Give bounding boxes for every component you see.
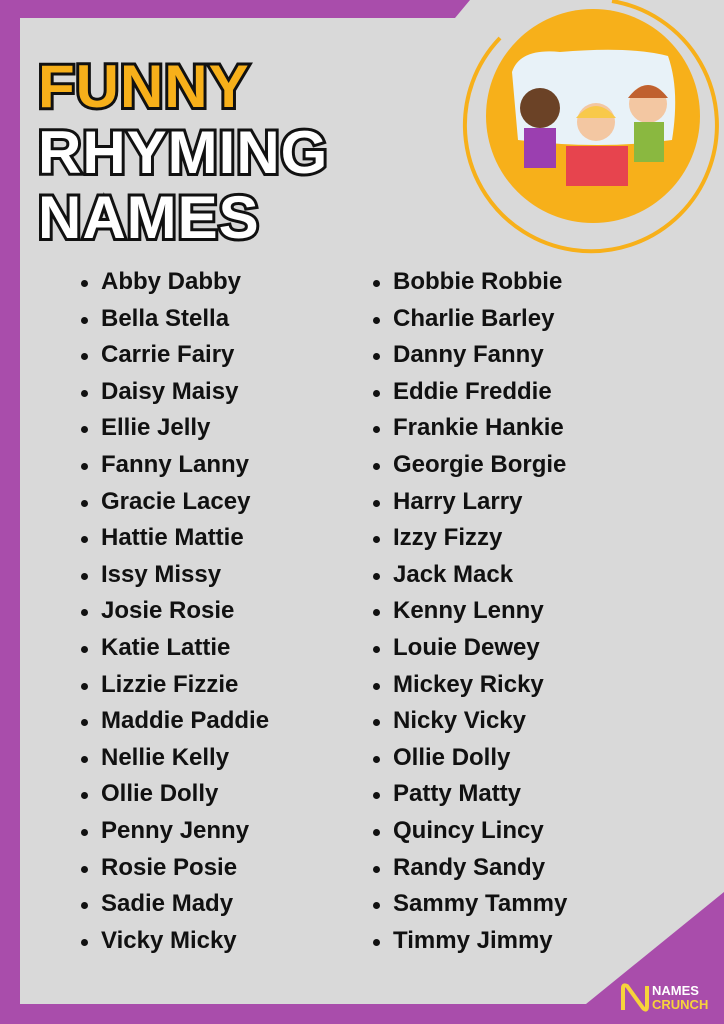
names list: right column: Harry Larry (393, 488, 522, 515)
names list: right column: Georgie Borgie (393, 451, 566, 478)
names list: left column: Carrie Fairy (101, 341, 234, 368)
names list: right column: Izzy Fizzy (393, 524, 502, 551)
text: NAMES (38, 184, 260, 251)
names list: left column: Rosie Posie (101, 854, 237, 880)
names list: left column: Bella Stella (101, 305, 229, 332)
names list: right column: Charlie Barley (393, 305, 554, 332)
names list: left column: Ollie Dolly (101, 780, 218, 807)
text: FUNNY (38, 53, 250, 120)
names list: right column: Ollie Dolly (393, 744, 510, 771)
names list: left column: Hattie Mattie (101, 524, 244, 551)
names list: left column: Ellie Jelly (101, 414, 210, 441)
names list: left column: Lizzie Fizzie (101, 671, 238, 698)
names list: right column: Timmy Jimmy (393, 927, 553, 954)
names list: left column: Vicky Micky (101, 927, 237, 954)
names list: right column (373, 268, 568, 954)
text: RHYMING (38, 119, 328, 186)
names list: right column: Jack Mack (393, 561, 513, 588)
names list: left column: Daisy Maisy (101, 378, 238, 405)
names list: right column: Louie Dewey (393, 634, 540, 661)
names list: left column: Sadie Mady (101, 890, 233, 917)
names list: left column: Katie Lattie (101, 634, 230, 661)
names list: right column: Quincy Lincy (393, 817, 544, 844)
logo: NAMES (652, 983, 699, 998)
names list: right column: Bobbie Robbie (393, 268, 562, 295)
names list: left column: Josie Rosie (101, 597, 234, 624)
names list: left column: Maddie Paddie (101, 707, 269, 734)
names list: left column: Penny Jenny (101, 817, 249, 844)
orange circle icon (486, 9, 700, 223)
names list: left column: Fanny Lanny (101, 451, 249, 478)
names list: right column: Frankie Hankie (393, 414, 564, 441)
names list: right column: Nicky Vicky (393, 707, 526, 734)
names list: right column: Danny Fanny (393, 341, 544, 368)
names list: right column: Sammy Tammy (393, 890, 567, 917)
names list: right column: Eddie Freddie (393, 378, 552, 405)
names list: left column: Gracie Lacey (101, 488, 250, 515)
names list: right column: Randy Sandy (393, 854, 545, 880)
names list: left column: Abby Dabby (101, 268, 241, 295)
outer ring (465, 1, 717, 251)
names list: right column: Mickey Ricky (393, 671, 544, 698)
logo: CRUNCH (652, 997, 708, 1012)
names list: left column: Issy Missy (101, 561, 221, 588)
names list: right column: Kenny Lenny (393, 597, 544, 624)
logo (621, 983, 708, 1012)
title (38, 53, 328, 251)
names list: right column: Patty Matty (393, 780, 521, 807)
names list: left column (81, 268, 269, 954)
names list: left column: Nellie Kelly (101, 744, 229, 771)
